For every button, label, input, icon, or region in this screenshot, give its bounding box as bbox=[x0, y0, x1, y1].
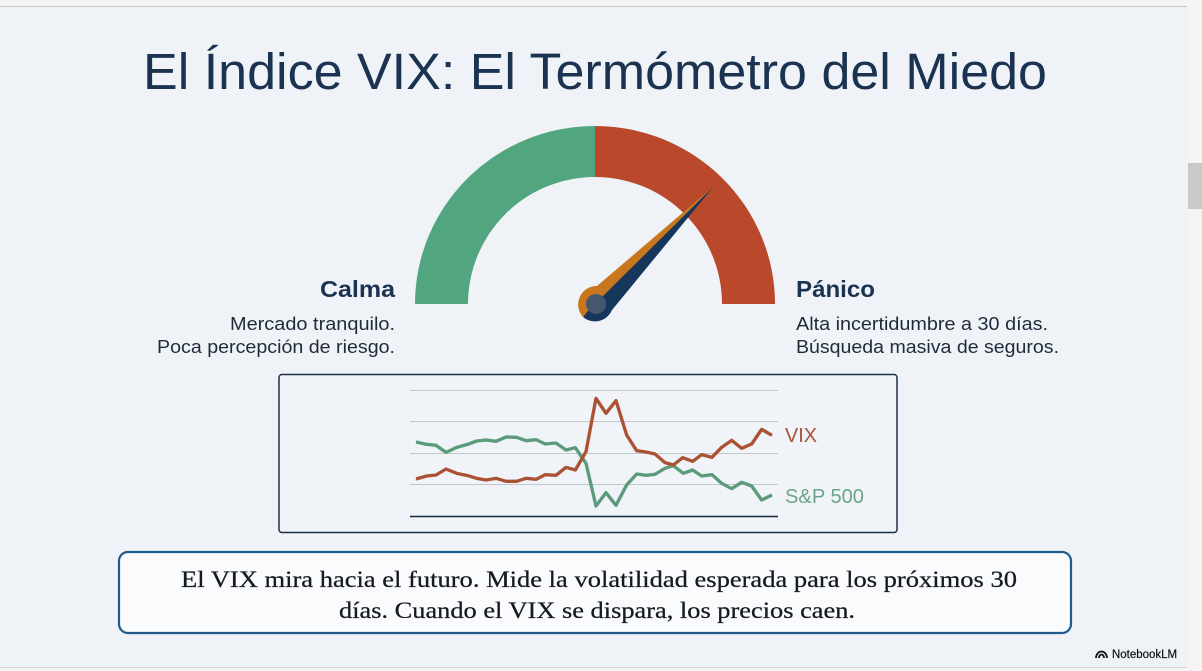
title: El Índice VIX: El Termómetro del Miedo bbox=[143, 43, 1047, 100]
gauge bbox=[415, 126, 775, 321]
label: calm: Mercado tranquilo. bbox=[230, 313, 395, 334]
VIX label: VIX bbox=[785, 425, 817, 447]
label: panic: Búsqueda masiva de seguros. bbox=[796, 336, 1059, 357]
label: panic: Pánico bbox=[796, 276, 875, 302]
S&P 500 line bbox=[416, 437, 772, 506]
label: calm bbox=[157, 276, 395, 357]
NotebookLM logo: NotebookLM bbox=[1112, 649, 1177, 661]
label: panic: Alta incertidumbre a 30 días. bbox=[796, 313, 1048, 334]
gauge arc: calm bbox=[415, 126, 595, 304]
callout bbox=[119, 552, 1071, 633]
gauge needle bbox=[578, 186, 714, 321]
label: calm: Poca percepción de riesgo. bbox=[157, 336, 395, 357]
line chart panel bbox=[279, 374, 897, 532]
VIX line bbox=[416, 398, 772, 481]
gauge arc: panic bbox=[595, 126, 775, 304]
callout: El VIX mira hacia el futuro. Mide la volatilidad esperada para los próximos 30 bbox=[181, 567, 1017, 593]
label: calm: Calma bbox=[320, 276, 395, 302]
label: panic bbox=[796, 276, 1059, 357]
scrollbar thumb bbox=[1188, 163, 1202, 209]
callout: días. Cuando el VIX se dispara, los precios caen. bbox=[339, 598, 855, 624]
S&P 500 label: S&P 500 bbox=[785, 486, 864, 508]
